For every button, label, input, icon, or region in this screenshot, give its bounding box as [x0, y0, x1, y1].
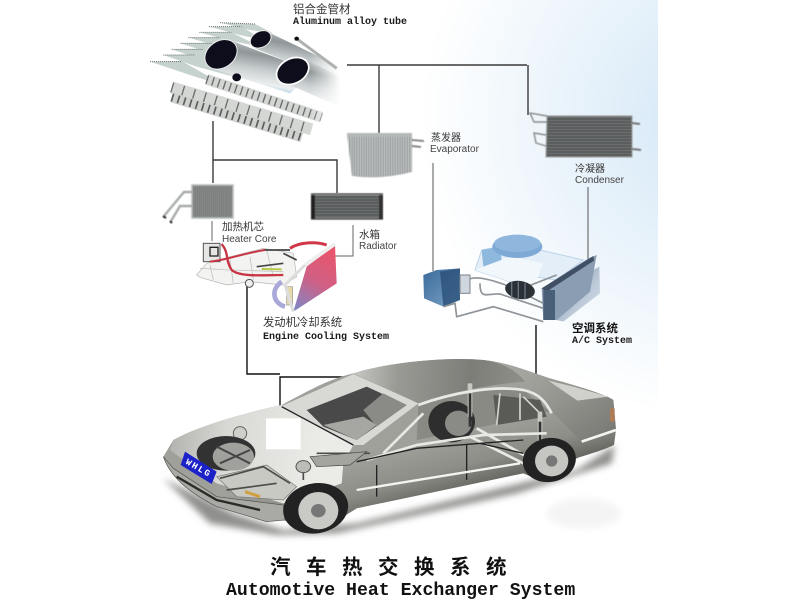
label: condenser [575, 162, 625, 186]
label: condenser: Condenser [575, 175, 625, 186]
struts [470, 383, 540, 447]
blue hose [274, 282, 285, 307]
faint smudge [547, 498, 620, 528]
tube openings [199, 33, 243, 75]
label: aluminum alloy tube: 铝合金管材 [293, 2, 351, 16]
rear side window [417, 389, 550, 440]
icon: condenser [530, 113, 641, 157]
pipes [443, 275, 557, 322]
label: radiator [359, 228, 397, 252]
white patch [266, 418, 301, 449]
icon: radiator [311, 194, 383, 219]
flat fins [150, 23, 273, 87]
spare wheel [428, 401, 475, 442]
shadow [163, 445, 615, 535]
hood [170, 405, 353, 503]
label: evaporator: Evaporator [430, 144, 480, 155]
label: A/C system [572, 321, 632, 347]
label: aluminum alloy tube: Aluminum alloy tube [293, 16, 407, 28]
label: engine cooling system: Engine Cooling System [263, 331, 389, 343]
badge [181, 452, 217, 484]
rear glass highlight [548, 381, 608, 401]
title: 汽车热交换系统 [270, 555, 522, 579]
badge: WHLG [183, 457, 213, 480]
bumper [163, 457, 285, 522]
title [226, 555, 575, 600]
label: heater core: Heater Core [222, 234, 277, 245]
label: evaporator [430, 131, 480, 155]
icon: evaporator [347, 133, 424, 177]
car body [163, 359, 616, 533]
radiator panel [293, 245, 337, 312]
evaporator box [423, 268, 460, 307]
fade [310, 27, 342, 142]
icon: A/C system [423, 235, 600, 322]
icon: engine cooling system [197, 243, 337, 312]
front wheel [279, 478, 352, 539]
icon: aluminum alloy tubes [150, 23, 342, 142]
illustration: car [163, 359, 620, 539]
label: aluminum alloy tube [293, 2, 407, 28]
label: heater core [222, 220, 277, 245]
label: A/C system: 空调系统 [572, 321, 618, 335]
label: A/C system: A/C System [572, 335, 632, 347]
tail light [610, 408, 615, 422]
chrome strips [357, 463, 520, 490]
front inner wheel [197, 436, 255, 471]
front mechanics [217, 465, 297, 500]
red hoses [222, 244, 283, 275]
connector lines [212, 65, 588, 410]
rear deck [483, 360, 616, 442]
label: heater core: 加热机芯 [222, 220, 264, 233]
corrugated rows [172, 79, 322, 137]
label: engine cooling system: 发动机冷却系统 [263, 315, 342, 329]
engine [475, 247, 583, 282]
engine block [197, 248, 297, 285]
back panel [557, 267, 600, 322]
rear wheel [519, 434, 579, 486]
windshield [282, 374, 418, 445]
label: radiator: 水箱 [359, 228, 380, 241]
label: radiator: Radiator [359, 241, 397, 252]
thin tube [297, 39, 337, 68]
compressor [504, 279, 536, 301]
label: evaporator: 蒸发器 [431, 131, 461, 144]
roof [353, 359, 525, 403]
label: condenser: 冷凝器 [575, 162, 605, 175]
tube bodies [255, 31, 340, 82]
icon: heater core [163, 185, 233, 223]
front panel [542, 255, 597, 320]
frame rails [367, 389, 552, 463]
label: engine cooling system [263, 315, 389, 343]
background panel [142, 0, 658, 600]
